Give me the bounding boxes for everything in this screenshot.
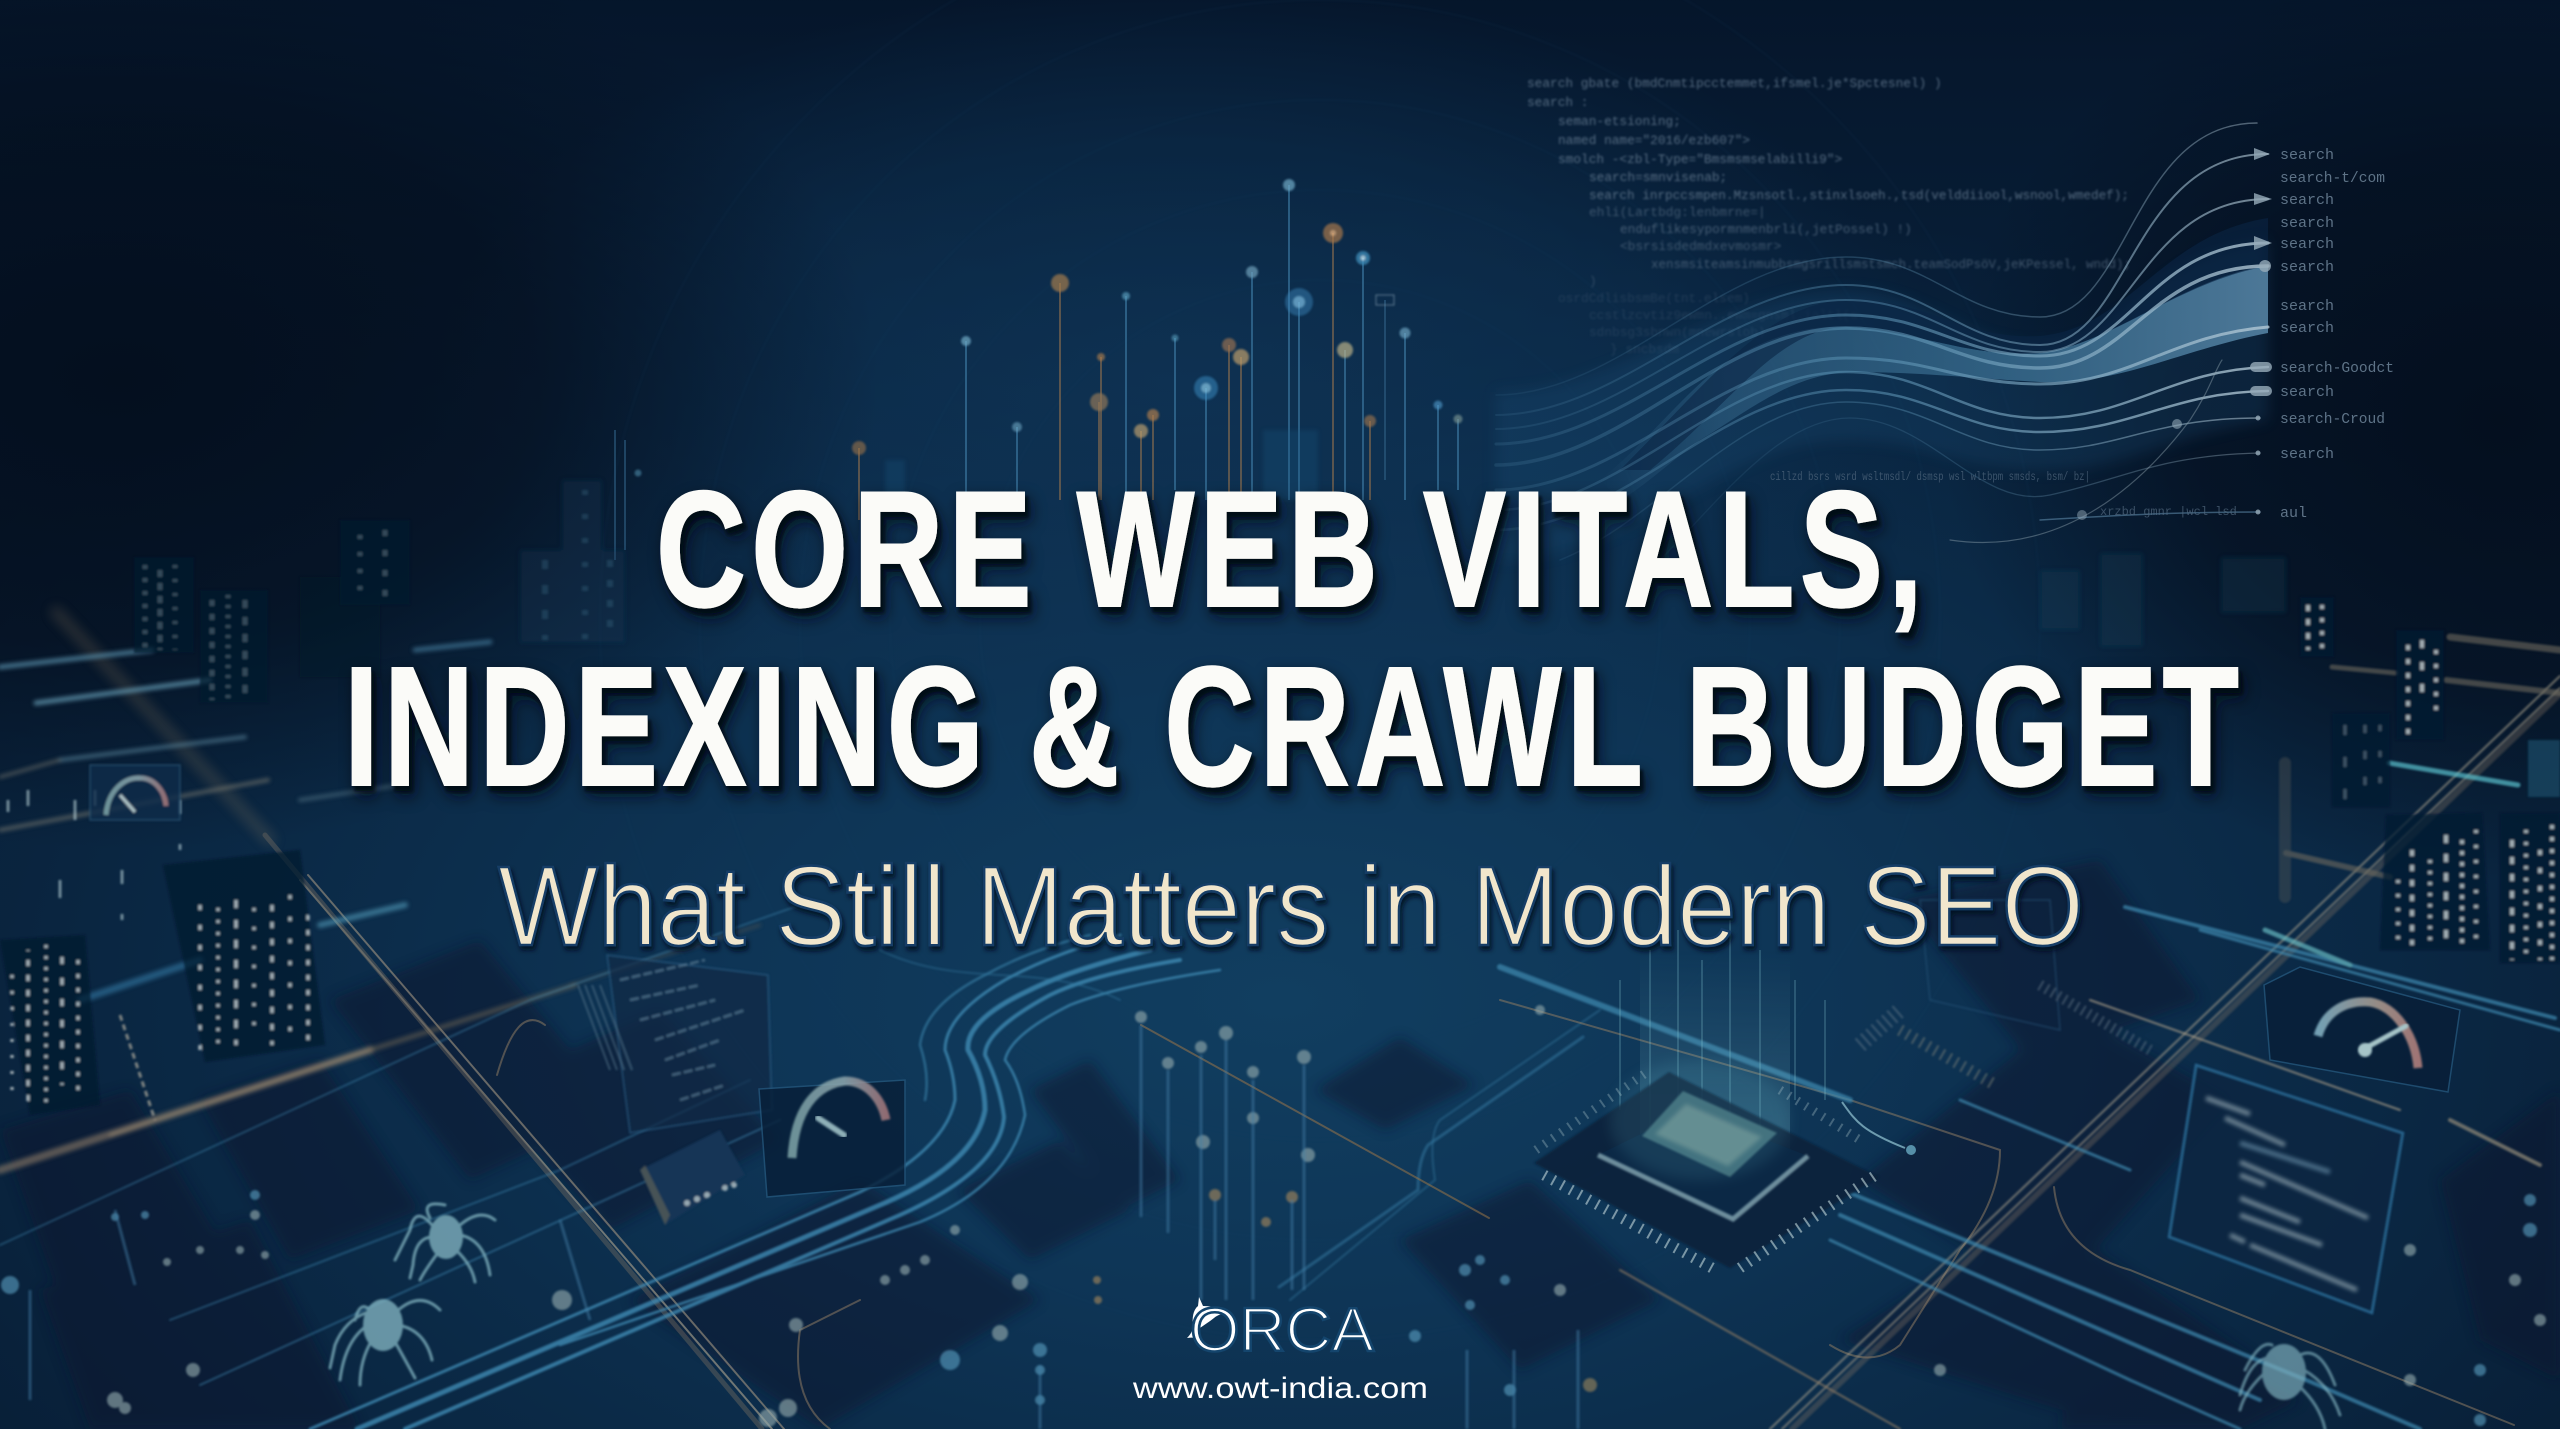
title: CORE WEB VITALS, (656, 457, 1928, 641)
left cross road (0, 642, 760, 1170)
code snippet overlay, top right: named name="2016/ezb607"> (1558, 133, 1750, 148)
stream labels: search (2280, 320, 2334, 337)
flow chart of search streams (1496, 123, 2394, 560)
scattered circuit nodes (1, 1005, 2546, 1429)
right diagonal road (1770, 676, 2560, 1429)
right city buildings (2040, 553, 2560, 963)
code snippet overlay, top right: search gbate (bmdCnmtipcctemmet,ifsmel.je*Spctesnel) ) (1527, 76, 1942, 91)
code snippet overlay, top right: <bsrsisdedmdxevmosmr> (1620, 239, 1781, 254)
main wave band (1600, 265, 2268, 500)
stream labels: search (2280, 384, 2334, 401)
code snippet overlay, top right: } sncbsdm (1610, 342, 1679, 357)
code snippet overlay, top right: xensmsiteamsinmubbsmgsrillsmstsmch.teamSodPsöV,jeKPessel, wndd); (1651, 257, 2131, 272)
stream labels: search-t/com (2280, 170, 2385, 187)
stream arrowheads (2077, 148, 2272, 520)
ORCA logo: ORCA (1190, 1296, 1375, 1365)
gauge panel, lower right (2264, 967, 2460, 1092)
stream labels: search (2280, 298, 2334, 315)
code snippet overlay, top right: sdnbsg3sbnwn(mnewrslob) (1589, 325, 1766, 340)
code snippet overlay, top right: smolch -<zbl-Type="Bmsmsmselabilli9"> (1558, 152, 1842, 167)
processor chip with glow (1534, 920, 1916, 1268)
title (344, 457, 2244, 822)
code snippet overlay, top right: search=smnvisenab; (1589, 170, 1727, 185)
spider one (395, 1204, 495, 1282)
circuit board panels, lower right (1860, 900, 2150, 1085)
code panel, lower left (578, 955, 772, 1133)
server cube, lower left (640, 1130, 745, 1225)
code snippet overlay, top right: ccstlzcvtiz9ewmn..ewm=gnsml.ialtl(s. (1589, 308, 1865, 323)
flow chart of search streams: cillzd bsrs wsrd wsltmsdl/ dsmsp wsl wltbpm smsds, bsm/ bz| (1770, 470, 2090, 484)
left diagonal road (56, 612, 784, 1429)
left city buildings (0, 480, 625, 1120)
spider two (330, 1299, 440, 1385)
stream labels: search (2280, 215, 2334, 232)
code snippet overlay, top right: osrdCdlisbsmBe(tnt.elsem) (1558, 291, 1750, 306)
stream labels: search (2280, 259, 2334, 276)
stream labels: search (2280, 147, 2334, 164)
code panel, lower right (2169, 1065, 2403, 1313)
right tan bars (2285, 637, 2560, 897)
code snippet overlay, top right: search inrpccsmpen.Mzsnsotl.,stinxlsoeh.,tsd(velddiiool,wsnool,wmedef); (1589, 188, 2129, 203)
left blue flow lines (0, 905, 1600, 1429)
code snippet overlay, top right: enduflikesypormnmenbrli(,jetPossel) !) (1620, 222, 1912, 237)
stream labels: aul (2280, 505, 2307, 522)
diagonal roads and data lines (0, 612, 2560, 1429)
stream labels: search (2280, 192, 2334, 209)
code snippet overlay, top right: seman-etsioning; (1558, 114, 1681, 129)
website url: www.owt-india.com (1132, 1372, 1428, 1405)
stream labels: search-Croud (2280, 411, 2385, 428)
stream labels: search (2280, 236, 2334, 253)
crawler spiders (330, 1204, 2340, 1429)
code snippet overlay, top right: ehli(Lartbdg:lenbmrne=| (1589, 205, 1766, 220)
stream labels: search (2280, 446, 2334, 463)
code snippet overlay, top right (1527, 76, 2131, 357)
data pins, top centre (615, 179, 1462, 560)
spider three (2240, 1344, 2340, 1429)
ground dashboards and code panels (90, 765, 2460, 1313)
subtitle: What Still Matters in Modern SEO (498, 843, 2084, 969)
stream labels: search-Goodct (2280, 360, 2394, 377)
code snippet overlay, top right: search : (1527, 95, 1588, 110)
small gauge, far left (90, 765, 180, 820)
gauge panel, lower left (759, 1080, 905, 1197)
icon: orca whale (1187, 1297, 1230, 1340)
tan circuit traces (497, 1000, 2514, 1429)
right blue streaks (1500, 763, 2560, 1429)
stream labels (2280, 147, 2394, 522)
flow chart of search streams: xrzbd gmnr |wcl lsd (2100, 505, 2237, 519)
code snippet overlay, top right: ) (1589, 274, 1597, 289)
